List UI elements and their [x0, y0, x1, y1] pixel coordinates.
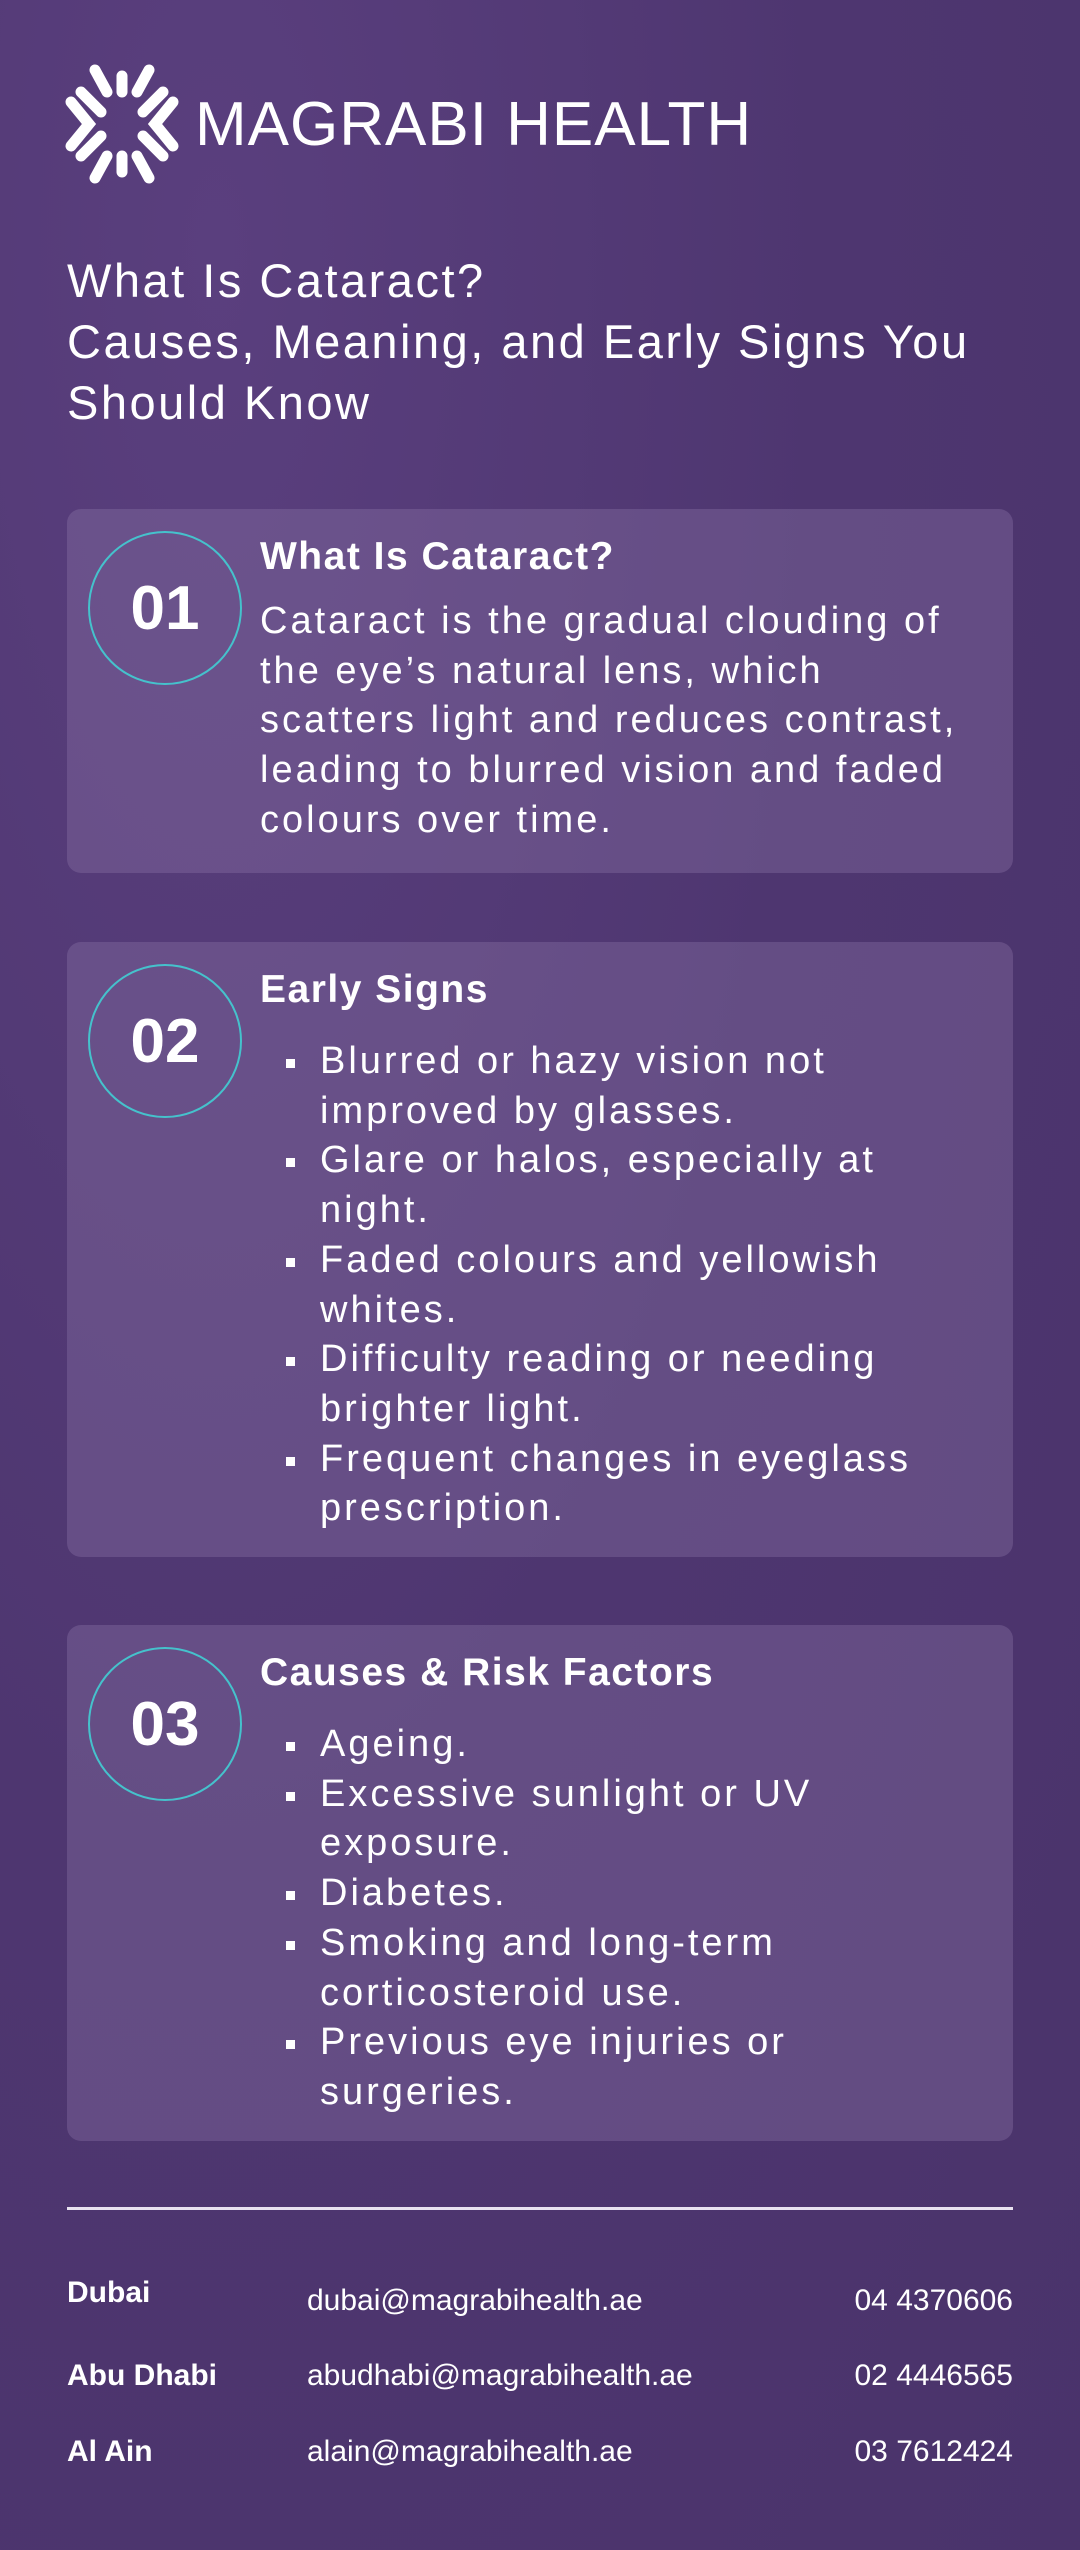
text: scatters light and reduces contrast, — [260, 699, 957, 741]
title — [67, 254, 970, 429]
number 02 — [88, 964, 242, 1118]
title: What Is Cataract? — [67, 254, 486, 307]
list: surgeries. — [320, 2071, 517, 2113]
number 03: 03 — [131, 1690, 199, 1758]
contact: Abu Dhabi: abudhabi@magrabihealth.ae — [307, 2359, 693, 2392]
number 03 — [88, 1647, 242, 1801]
number 02: 02 — [131, 1006, 199, 1076]
list: improved by glasses. — [320, 1090, 737, 1132]
number 01: 01 — [131, 574, 199, 642]
list: Difficulty reading or needing — [320, 1338, 877, 1380]
heading: Causes & Risk Factors — [260, 1651, 714, 1694]
heading: What Is Cataract? — [260, 535, 615, 578]
panel: causes — [67, 1625, 1013, 2141]
brand name: MAGRABI HEALTH — [195, 90, 752, 159]
list: whites. — [320, 1289, 459, 1331]
number 01 — [88, 531, 242, 685]
contact: Al Ain: alain@magrabihealth.ae — [307, 2435, 633, 2468]
list: Ageing. — [320, 1723, 470, 1765]
list: Smoking and long-term — [320, 1922, 776, 1964]
title: Should Know — [67, 376, 371, 429]
panel: early signs — [67, 942, 1013, 1557]
list: Blurred or hazy vision not — [320, 1040, 827, 1082]
list: exposure. — [320, 1822, 514, 1864]
list: Previous eye injuries or — [320, 2021, 787, 2063]
contact: Dubai: Dubai — [67, 2276, 150, 2309]
logo — [66, 64, 752, 184]
contact: Abu Dhabi — [67, 2359, 1013, 2392]
text — [260, 600, 957, 841]
contact: Dubai: 04 4370606 — [854, 2284, 1013, 2317]
list: prescription. — [320, 1487, 566, 1529]
list: Excessive sunlight or UV — [320, 1773, 812, 1815]
contact: Dubai: dubai@magrabihealth.ae — [307, 2284, 643, 2317]
list: Glare or halos, especially at — [320, 1139, 876, 1181]
panel: what is cataract — [67, 509, 1013, 873]
contact: Al Ain — [67, 2435, 1013, 2468]
list: corticosteroid use. — [320, 1972, 685, 2014]
list: night. — [320, 1189, 431, 1231]
list: Diabetes. — [320, 1872, 508, 1914]
contact: Abu Dhabi: Abu Dhabi — [67, 2359, 217, 2392]
contact: Al Ain: Al Ain — [67, 2435, 153, 2468]
text: the eye’s natural lens, which — [260, 650, 824, 692]
list — [286, 1040, 911, 1529]
text: Cataract is the gradual clouding of — [260, 600, 942, 642]
list: Frequent changes in eyeglass — [320, 1438, 911, 1480]
title: Causes, Meaning, and Early Signs You — [67, 315, 970, 368]
contact: Abu Dhabi: 02 4446565 — [854, 2359, 1013, 2392]
heading: Early Signs — [260, 968, 489, 1011]
icon: logo mark — [66, 64, 178, 184]
text: leading to blurred vision and faded — [260, 749, 946, 791]
list: Faded colours and yellowish — [320, 1239, 880, 1281]
contact: Dubai — [67, 2276, 1013, 2317]
list — [286, 1723, 812, 2113]
contact: Al Ain: 03 7612424 — [854, 2435, 1013, 2468]
list: brighter light. — [320, 1388, 585, 1430]
text: colours over time. — [260, 799, 614, 841]
